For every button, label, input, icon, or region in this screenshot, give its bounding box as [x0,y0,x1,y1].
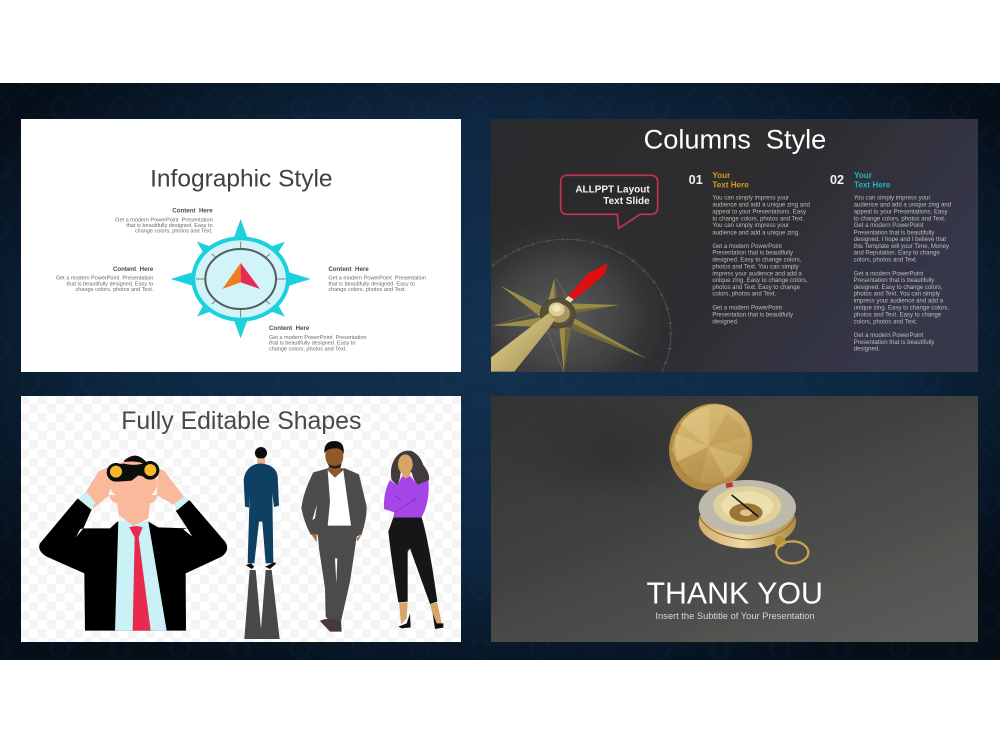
column 2 body text: appeal to your Presentations. Easy [854,209,948,215]
text block: bottom: Content Here [269,325,310,332]
compass base [699,480,796,548]
column 1 body text: designed. [712,319,739,325]
panel: Fully Editable Shapes slide [20,395,465,645]
compass ring [774,536,808,563]
column 2 body text: Get a modern PowerPoint [854,271,924,277]
title: Columns Style: Columns Style [644,124,826,155]
heading: Your Text Here gold: Text Here [712,180,749,189]
column 2 body text: unique zing. Easy to change colors, [854,306,949,312]
column 2 body text: audience and add a unique zing and [854,203,951,209]
column 1 body text: audience and add a unique zing. [712,230,800,236]
icon: binoculars [107,461,159,482]
panel: Columns Style slide [491,119,978,372]
text block: top left: Get a modern PowerPoint Presentation [115,217,213,223]
text block: right: change colors, photos and Text. [328,287,407,293]
text block: bottom: change colors, photos and Text. [269,346,347,352]
text block: top left: change colors, photos and Text. [135,229,213,235]
title: Fully Editable Shapes: Fully Editable Shapes [121,408,361,435]
text block: right: Content Here [328,266,369,273]
column 1 body text: You can simply impress your [712,196,789,202]
column 2 body text: You can simply impress your [854,196,930,202]
compass lid [669,404,752,490]
compass illustration [491,238,673,372]
column 2 body text: and Reputation. Easy to change [854,251,940,257]
column 1 body text: audience and add a unique zing and [712,203,810,209]
column 1 body text: Get a modern PowerPoint [712,306,782,312]
icon: open brass pocket compass [669,404,810,564]
column 2 body text: designed. Easy to change colors, [854,285,943,291]
compass needle [491,263,608,372]
column 2 body text: designed. [854,347,880,353]
heading: Your Text Here gold: Your [712,171,731,180]
panel: Infographic Style slide [21,119,461,372]
text block: bottom: that is beautifully designed. Easy to [269,341,355,347]
column 2 body text: Presentation that is beautifully [854,230,935,236]
figure: woman in purple top [384,451,443,629]
text block: left: that is beautifully designed. Easy to [67,281,153,287]
text block: right: that is beautifully designed. Easy to [328,281,415,287]
column 1 body text: unique zing. Easy to change colors, [712,278,808,284]
title: THANK YOU: THANK YOU [646,577,823,610]
column 1 body text: Presentation that is beautifully [712,251,794,257]
subtitle: Insert the Subtitle of Your Presentation [655,611,815,621]
column 2 body text: designed. I hope and I believe that [854,237,946,243]
heading: Your Text Here teal: Your [854,171,873,180]
column 2 body text: Presentation that is beautifully [854,340,935,346]
column 1 body text: appeal to your Presentations. Easy [712,209,807,215]
panel: Thank You slide [491,388,978,642]
column 2 body text: colors, photos and Text. [854,319,918,325]
column 2 body text: photos and Text. You can simply [854,292,941,298]
number 01: 01 [689,173,703,187]
column 2 body text: Get a modern PowerPoint [854,223,924,229]
text block: left: Content Here [113,266,154,273]
figure: businessman with binoculars [39,456,227,631]
column 2 body text: this Template will your Time, Money [854,244,950,250]
column 2 body text: Get a modern PowerPoint [854,333,924,339]
text block: left: change colors, photos and Text. [76,287,154,293]
column 1 body text: photos and Text. Easy to change [712,285,801,291]
column 2 body text: colors, photos and Text. [854,258,918,264]
title: Infographic Style: Infographic Style [150,165,333,192]
column 1 body text: photos and Text. You can simply [712,264,800,270]
text block: bottom: Get a modern PowerPoint Presentation [269,335,366,341]
column 2 body text: Presentation that is beautifully [854,278,935,284]
column 1 body text: to change colors, photos and Text. [712,216,805,222]
column 1 body text: impress your audience and add a [712,271,802,277]
text block: right: Get a modern PowerPoint Presentation [328,276,426,282]
text block: top left: Content Here [172,207,213,214]
text block: left: Get a modern PowerPoint Presentation [56,276,153,282]
callout: ALLPPT Layout Text Slide: ALLPPT Layout [575,185,650,196]
column 2 body text: photos and Text. Easy to change [854,312,942,318]
column 1 body text: Get a modern PowerPoint [712,244,782,250]
column 2 body text: impress your audience and add a [854,299,944,305]
column 1 body text: colors, photos and Text. [712,292,776,298]
text block: top left: that is beautifully designed. Easy to [126,223,213,229]
heading: Your Text Here teal: Text Here [854,180,891,189]
callout: ALLPPT Layout Text Slide [561,175,658,228]
column 1 body text: designed. Easy to change colors, [712,258,802,264]
figure: man in blue suit from behind [244,447,280,639]
icon: teal compass [171,219,311,338]
dark damask background band [0,83,1000,660]
icon: orange and red arrow [222,263,260,289]
column 1 body text: You can simply impress your [712,223,789,229]
number 02: 02 [830,173,844,187]
figure: man in gray suit [301,441,367,632]
column 1 body text: Presentation that is beautifully [712,313,794,319]
column 2 body text: to change colors, photos and Text. [854,216,946,222]
callout: ALLPPT Layout Text Slide: Text Slide [603,196,650,207]
